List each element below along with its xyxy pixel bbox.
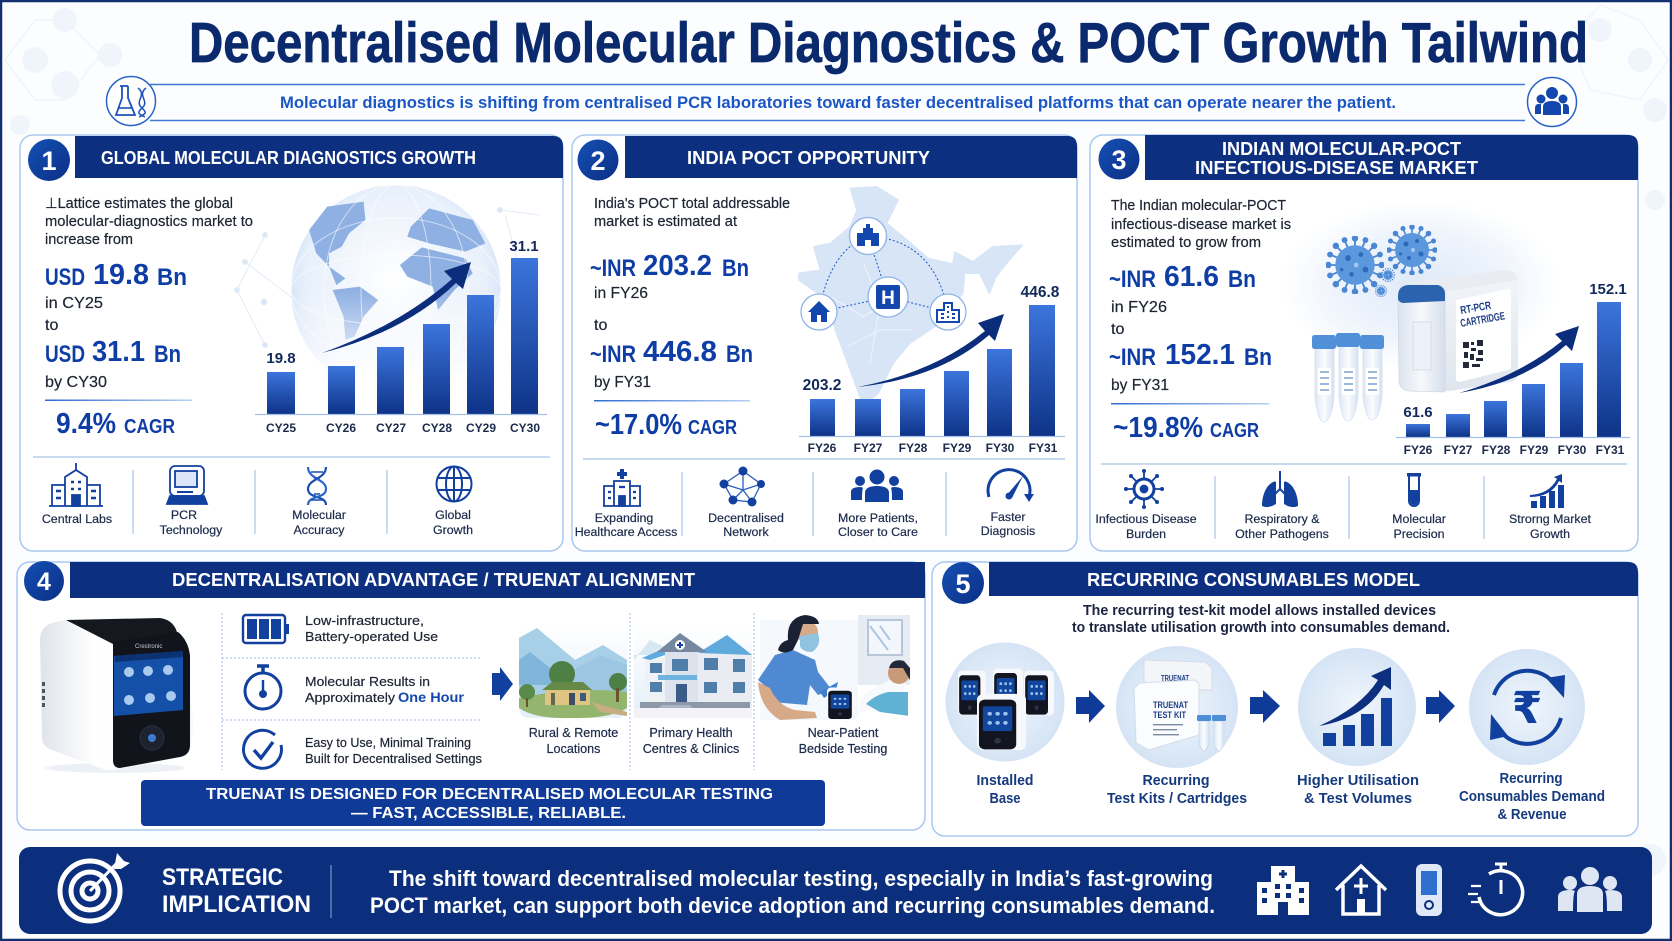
benefit: easy to use [305,736,482,766]
subtitle text: Molecular diagnostics is shifting from centralised PCR laboratories toward faster decentralised platforms that can operate nearer the patient. [280,94,1396,112]
benefit: easy to use: Easy to Use, Minimal Training [305,736,471,750]
icon: test tube [1407,473,1421,506]
viruses [1326,225,1437,297]
bar chart: CY25-CY30: CY26 [326,421,356,435]
RT-PCR cartridge: RT-PCR [1459,300,1492,317]
callout banner: TRUENAT IS DESIGNED FOR DECENTRALISED MOLECULAR TESTING [206,786,773,803]
icon: network [720,466,765,506]
stat: INR 446.8 Bn: ~INR [590,341,636,368]
step: recurring consumables demand [1459,649,1605,823]
icon: DNA helix [308,467,326,505]
illustration: rural [519,622,627,718]
label: Faster Diagnosis: Faster [990,510,1026,524]
node: home [801,294,837,330]
bar chart: FY26-FY31: FY30 [1558,443,1587,457]
by FY31: by FY31 [1111,377,1169,394]
panel 1 heading: GLOBAL MOLECULAR DIAGNOSTICS GROWTH [101,147,476,168]
CAGR 9.4%: 9.4% [56,408,116,440]
label: Rural & Remote Locations [529,726,618,756]
arrow [1426,690,1455,723]
market description: increase from [45,232,133,248]
panel 3 header [1145,135,1638,180]
panel 3: Indian molecular-POCT infectious-disease market [1090,135,1638,551]
strategic implication text [370,866,1215,918]
badge 5 [942,562,984,604]
icon: home [1336,866,1386,914]
node: clinic [850,218,886,254]
illustration: near-patient bedside testing [758,615,910,720]
year text: in CY25 [45,295,103,312]
model description: to translate utilisation growth into consumables demand. [1072,620,1450,636]
label: Decentralised Network: Network [723,525,770,539]
Truenat device: Crestronic [135,644,162,650]
step: recurring consumables demand: & Revenue [1498,807,1566,823]
arrow [1076,690,1105,723]
label: Primary Health Centres & Clinics: Centres & Clinics [643,742,739,756]
bar chart: FY26-FY31 [799,284,1065,455]
stat: USD 31.1 Bn: 31.1 [92,336,145,368]
panel 5: recurring consumables model [932,562,1638,836]
icon: handheld device [1416,864,1442,916]
stat: USD 19.8 Bn: Bn [157,264,187,291]
label: Rural & Remote Locations: Locations [547,742,600,756]
bar chart: CY25-CY30 [255,238,547,435]
panel 2 heading: INDIA POCT OPPORTUNITY [687,147,931,168]
badge 4: 4 [37,568,51,596]
label: Respiratory & Other Pathogens: Other Pathogens [1235,527,1329,541]
stat: INR 152.1 Bn: 152.1 [1165,339,1235,371]
growth arrow [858,314,1004,387]
label: Rural & Remote Locations: Rural & Remote [529,726,618,740]
RT-PCR cartridge: CARTRIDGE [1459,310,1506,330]
stat: INR 61.6 Bn [1109,261,1256,293]
rule [1111,403,1269,404]
icon: expanding hospital [603,469,641,506]
market description: molecular-diagnostics market to [45,214,253,230]
label: Molecular Precision: Molecular [1392,512,1446,526]
icon: people [1528,78,1576,126]
icon: people [851,470,903,502]
illustration: primary health centre [634,625,752,718]
node: hospital H [868,277,908,317]
icon: flask and DNA [106,76,156,126]
label: Strorng Market Growth: Strorng Market [1509,512,1592,526]
model description: The recurring test-kit model allows installed devices [1083,603,1436,619]
market description: estimated to grow from [1111,235,1261,251]
bar chart: FY26-FY31: FY27 [854,441,883,455]
panel 3 heading [1195,138,1479,178]
label: Molecular Precision: Precision [1394,527,1445,541]
label: Molecular Accuracy [292,508,346,537]
growth arrow [1459,326,1579,393]
year text: in FY26 [594,285,648,302]
label: Near-Patient Bedside Testing [799,726,887,756]
bar chart: FY26-FY31: 61.6 [1403,404,1433,421]
icon: battery [243,615,289,643]
label: Global Growth: Global [435,508,471,522]
strategic implication band [19,847,1652,934]
label: Primary Health Centres & Clinics: Primary Health [649,726,733,740]
stat: USD 31.1 Bn: Bn [154,341,181,368]
step: installed base: Installed [976,773,1034,789]
label: PCR Technology [160,508,223,537]
stat: INR 446.8 Bn: 446.8 [643,336,717,368]
stat: USD 19.8 Bn: USD [45,264,85,291]
badge 1 [28,139,70,181]
benefit: one hour [305,674,465,705]
stat: USD 31.1 Bn: USD [45,341,85,368]
benefit: battery-operated: Low-infrastructure, [305,613,424,628]
stat: USD 19.8 Bn [45,259,187,291]
step: recurring test kits: TEST KIT [1153,710,1186,721]
badge 3 [1098,138,1140,180]
step: recurring test kits: TRUENAT [1161,674,1189,683]
label: Decentralised Network: Decentralised [708,511,784,525]
growth arrow [322,262,471,353]
badge 2 [578,140,618,180]
step: recurring test kits: TRUENAT [1153,700,1188,711]
icon: hospital [1257,866,1309,915]
stat: USD 19.8 Bn: 19.8 [93,259,149,291]
panel 4 header [70,562,925,598]
label: PCR Technology: Technology [160,523,223,537]
RT-PCR cartridge [1398,270,1518,392]
panel 5 header [989,562,1638,596]
CAGR 17.0%: ~17.0% [595,409,682,441]
bar chart: CY25-CY30: CY28 [422,421,452,435]
label: More Patients, Closer to Care [838,511,918,539]
badge 5: 5 [955,569,971,599]
bar chart: CY25-CY30: CY25 [266,421,296,435]
bar chart: CY25-CY30: CY30 [510,421,540,435]
CAGR 17.0% [595,409,737,441]
label: Near-Patient Bedside Testing: Near-Patient [808,726,879,740]
stat: INR 152.1 Bn [1109,339,1272,371]
icon: central labs [49,463,103,506]
label: Decentralised Network [708,511,784,539]
bar chart: FY26-FY31: FY31 [1596,443,1625,457]
label: Global Growth [433,508,473,537]
bar chart: FY26-FY31: FY30 [986,441,1015,455]
panel 1: global molecular diagnostics growth [20,135,563,551]
step: recurring consumables demand: Consumables Demand [1459,789,1605,805]
icon: lungs [1262,471,1298,507]
year text [45,295,103,334]
label: PCR Technology: PCR [171,508,197,522]
arrow [492,667,513,701]
benefit: one hour: Molecular Results in [305,674,430,689]
panel 1 header [75,136,563,178]
market description: market is estimated at [594,214,737,230]
benefit: battery-operated: Battery-operated Use [305,629,438,644]
CAGR 17.0%: CAGR [688,417,737,439]
label: Strorng Market Growth [1509,512,1592,541]
stat: INR 61.6 Bn: Bn [1228,266,1256,293]
icon: stopwatch [1468,864,1523,915]
year text [1111,299,1167,338]
stat: INR 203.2 Bn: ~INR [590,255,636,282]
callout banner [141,780,825,826]
label: Molecular Precision [1392,512,1446,541]
stat: INR 152.1 Bn: Bn [1244,344,1272,371]
step: higher utilisation: & Test Volumes [1304,791,1412,807]
icon: virus [1124,469,1164,509]
icon: PCR machine [167,466,207,504]
icon: check [243,730,281,768]
by FY31: by FY31 [594,374,651,391]
bar chart: CY25-CY30: 19.8 [266,350,296,367]
year text: in FY26 [1111,299,1167,316]
stat: INR 152.1 Bn: ~INR [1109,344,1156,371]
panel 3 heading: INFECTIOUS-DISEASE MARKET [1195,157,1479,178]
market description: The Indian molecular-POCT [1111,198,1286,214]
strategic implication heading [162,864,311,918]
bar chart: FY26-FY31: 446.8 [1021,284,1060,301]
panel 3 heading: INDIAN MOLECULAR-POCT [1222,138,1462,159]
model description [1072,603,1450,636]
bar chart: FY26-FY31: 203.2 [803,377,841,394]
bar chart: FY26-FY31: FY28 [1482,443,1511,457]
step: installed base: Base [990,791,1020,807]
year text [594,285,648,334]
bar chart: FY26-FY31: FY27 [1444,443,1473,457]
CAGR 19.8% [1113,412,1259,444]
subtitle bar [106,76,1576,126]
panel 4 heading: DECENTRALISATION ADVANTAGE / TRUENAT ALIGNMENT [172,569,696,590]
label: Infectious Disease Burden: Burden [1126,527,1166,541]
benefit: battery-operated [305,613,438,644]
step: recurring consumables demand: Recurring [1500,771,1562,787]
market description [45,196,253,248]
label: Strorng Market Growth: Growth [1530,527,1570,541]
callout banner: — FAST, ACCESSIBLE, RELIABLE. [351,805,626,822]
label: More Patients, Closer to Care: More Patients, [838,511,918,525]
bar chart: FY26-FY31: FY28 [899,441,928,455]
label: Expanding Healthcare Access: Healthcare Access [575,525,677,539]
market description: ⊥Lattice estimates the global [45,196,233,212]
Truenat device [40,618,193,773]
year text: to [1111,321,1124,338]
stat: USD 31.1 Bn [45,336,181,368]
label: Molecular Accuracy: Accuracy [294,523,345,537]
CAGR 9.4%: CAGR [124,416,175,438]
benefit: easy to use: Built for Decentralised Settings [305,752,482,766]
stat: INR 446.8 Bn [590,336,753,368]
stat: INR 61.6 Bn: ~INR [1109,266,1156,293]
sample tubes [1312,333,1384,422]
rule [594,400,750,402]
CAGR 19.8%: CAGR [1210,420,1259,442]
label: Molecular Accuracy: Molecular [292,508,346,522]
step: recurring test kits: Test Kits / Cartridges [1107,791,1247,807]
label: Expanding Healthcare Access: Expanding [595,511,653,525]
step: recurring test kits [1107,646,1247,807]
badge 1: 1 [41,146,57,176]
icon: target [60,853,130,921]
icon: speed gauge [988,470,1034,502]
label: Central Labs: Central Labs [42,512,112,526]
market description [1111,198,1291,251]
by CY30: by CY30 [45,374,107,391]
globe illustration [234,184,540,396]
label: Respiratory & Other Pathogens: Respiratory & [1244,512,1320,526]
panel 2: India POCT opportunity [572,135,1077,551]
market description [594,196,790,230]
stat: INR 61.6 Bn: 61.6 [1164,261,1219,293]
stat: INR 203.2 Bn: 203.2 [643,250,712,282]
label: Global Growth: Growth [433,523,473,537]
label: Near-Patient Bedside Testing: Bedside Testing [799,742,887,756]
benefit: one hour: Approximately [305,690,396,705]
label: Faster Diagnosis: Diagnosis [981,524,1035,538]
stat: INR 446.8 Bn: Bn [726,341,753,368]
label: Expanding Healthcare Access [575,511,677,539]
label: More Patients, Closer to Care: Closer to Care [838,525,918,539]
soft backdrop [1280,200,1560,370]
bar chart: FY26-FY31: FY29 [1520,443,1549,457]
bar chart: FY26-FY31: FY26 [808,441,837,455]
bar chart: FY26-FY31 [1396,281,1630,457]
year text: to [594,317,607,334]
badge 4 [24,561,64,601]
panel 4: decentralisation advantage / Truenat alignment [17,561,925,830]
bar chart: CY25-CY30: CY27 [376,421,406,435]
India map with linked facilities [799,187,1023,407]
strategic implication heading: STRATEGIC [162,864,283,891]
bar chart: FY26-FY31: FY31 [1029,441,1058,455]
arrow [1250,690,1280,723]
strategic implication text: The shift toward decentralised molecular testing, especially in India’s fast-growing [389,866,1213,891]
market description: infectious-disease market is [1111,217,1291,233]
bar chart: FY26-FY31: FY26 [1404,443,1433,457]
step: installed base [946,642,1064,807]
bar chart: FY26-FY31: FY29 [943,441,972,455]
icon: stopwatch [245,666,281,709]
bar chart: CY25-CY30: CY29 [466,421,496,435]
icon: market growth [1530,474,1564,508]
badge 2: 2 [590,146,606,176]
label: Faster Diagnosis [981,510,1035,538]
label: Respiratory & Other Pathogens [1235,512,1329,541]
icon: globe [436,466,472,502]
icon: people group [1558,867,1622,912]
badge 3: 3 [1111,145,1127,175]
market description: India's POCT total addressable [594,196,790,212]
strategic implication text: POCT market, can support both device adoption and recurring consumables demand. [370,893,1215,918]
label: Primary Health Centres & Clinics [643,726,739,756]
CAGR 19.8%: ~19.8% [1113,412,1203,444]
step: recurring test kits: Recurring [1142,773,1210,789]
panel 2 header [625,136,1077,178]
panel 5 heading: RECURRING CONSUMABLES MODEL [1087,569,1420,590]
step: recurring consumables demand: ₹ [1512,684,1542,733]
year text: to [45,317,58,334]
benefit: one hour: One Hour [398,690,465,705]
step: higher utilisation [1297,648,1419,807]
node: building [930,294,966,330]
stat: INR 203.2 Bn [590,250,749,282]
bar chart: FY26-FY31: 152.1 [1589,281,1627,298]
CAGR 9.4% [56,408,175,440]
bar chart: CY25-CY30: 31.1 [509,238,539,255]
node: hospital H: H [881,288,895,309]
rule [45,400,192,401]
label: Infectious Disease Burden: Infectious Disease [1095,512,1197,526]
strategic implication heading: IMPLICATION [162,891,311,918]
stat: INR 203.2 Bn: Bn [722,255,749,282]
step: higher utilisation: Higher Utilisation [1297,773,1419,789]
label: Infectious Disease Burden [1095,512,1197,541]
